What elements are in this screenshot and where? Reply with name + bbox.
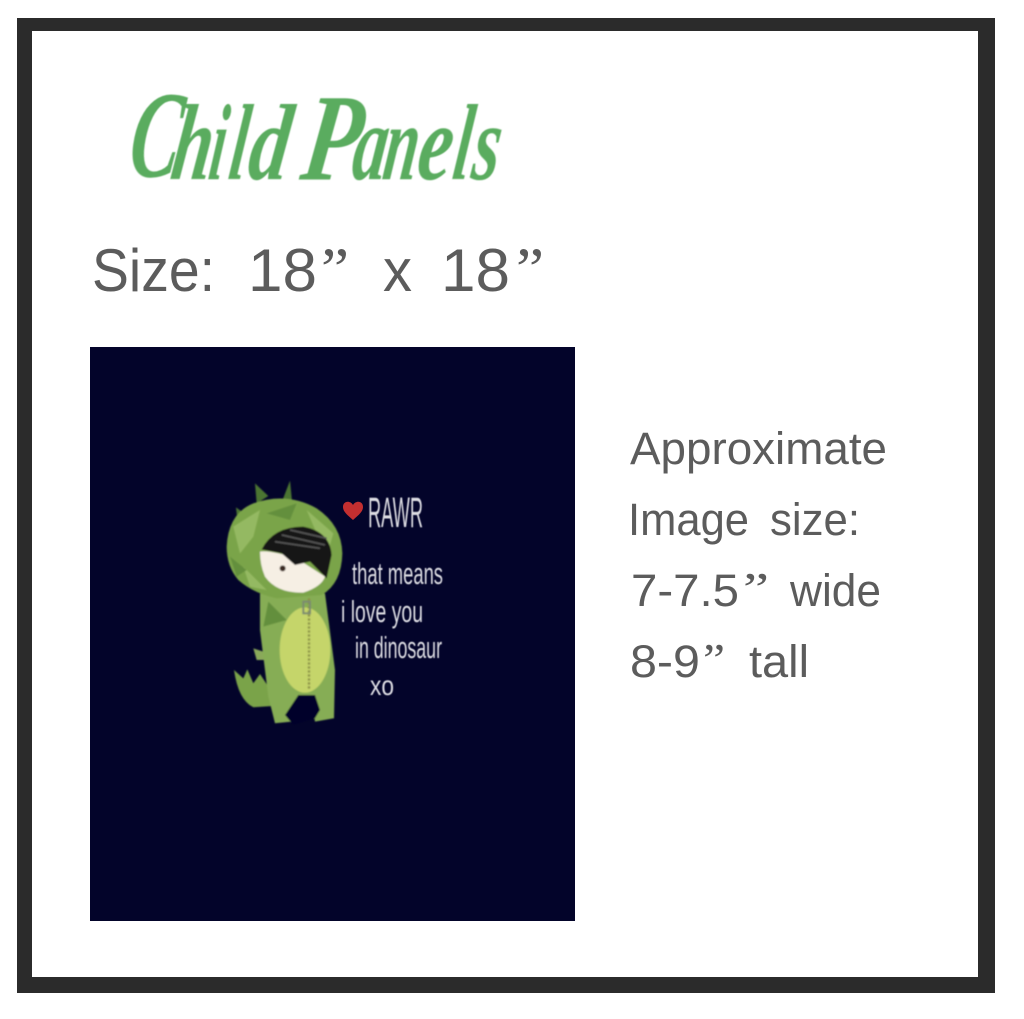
line 4: tall [749, 636, 809, 687]
line 2: size: [770, 494, 860, 545]
line 4 [630, 635, 809, 687]
title: a [346, 83, 397, 203]
hand [253, 648, 265, 660]
line 2: Image [628, 494, 749, 545]
eye [280, 565, 286, 571]
line 3 [631, 564, 881, 616]
line 2: i love you [341, 594, 423, 629]
line 3: in dinosaur [355, 630, 442, 665]
title: P [294, 69, 373, 206]
line 4: ” [703, 635, 725, 685]
title: n [377, 83, 428, 203]
title: C [122, 67, 193, 204]
line 4: 8-9 [630, 636, 700, 687]
panel: dark fabric [90, 347, 575, 921]
title: l [223, 83, 257, 203]
black gap between legs [285, 695, 320, 725]
legs and body [260, 593, 335, 723]
line 1: Approximate [630, 423, 887, 474]
line 1: that means [352, 556, 443, 591]
size heading: ” [516, 236, 544, 302]
hood shading [233, 510, 333, 590]
belly [280, 607, 330, 693]
sign-off: xo [370, 670, 394, 701]
line 3: wide [789, 565, 881, 616]
title [122, 67, 513, 206]
line 2 [628, 494, 860, 545]
title: e [411, 83, 462, 203]
size heading: Size: [92, 237, 215, 304]
size heading [92, 236, 544, 304]
icon: heart [343, 502, 363, 520]
title: i [203, 83, 235, 203]
size heading: x [383, 237, 412, 304]
icon: dinosaur child [227, 481, 342, 725]
line 3: ” [743, 564, 769, 614]
panel text: RAWR [368, 489, 423, 537]
hood [227, 499, 342, 598]
hair [262, 527, 332, 578]
face [260, 551, 325, 593]
spikes [236, 481, 308, 520]
image size text [628, 423, 887, 687]
zipper [305, 598, 312, 690]
title: d [242, 83, 301, 203]
title: h [165, 83, 222, 203]
panel text [341, 489, 443, 701]
size heading: 18 [248, 237, 317, 304]
title: l [447, 83, 481, 203]
size heading: 18 [441, 237, 510, 304]
size heading: ” [321, 236, 349, 302]
title: s [466, 83, 510, 203]
tail [234, 669, 290, 707]
line 3: 7-7.5 [631, 565, 739, 616]
